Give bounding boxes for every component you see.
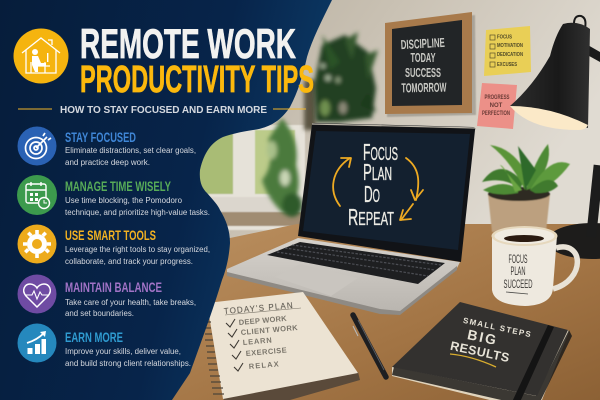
letter board text (400, 35, 447, 95)
plan checklist (238, 314, 299, 371)
plan checklist: DEEP WORK (238, 314, 288, 327)
heading: STAY FOCUSED (65, 130, 136, 145)
keyboard (267, 242, 445, 284)
icon: target (18, 126, 56, 166)
screen text (348, 139, 398, 230)
tip: earn more (18, 324, 191, 368)
sticky checklist text (497, 34, 523, 68)
photo: blurred window plant (262, 80, 316, 217)
mug text: PLAN (510, 264, 526, 278)
heading: MAINTAIN BALANCE (65, 280, 162, 295)
lamp light opening (510, 106, 588, 130)
description: collaborate, and track your progress. (65, 257, 193, 266)
tip: use smart tools (18, 224, 210, 266)
description (65, 245, 210, 266)
letter board text: SUCCESS (405, 65, 441, 80)
sticky checklist text: MOTIVATION (497, 43, 523, 49)
letter board text: TOMORROW (401, 80, 447, 95)
book cover text (449, 316, 532, 365)
book cover text: SMALL STEPS (462, 316, 532, 339)
notebook: today's plan (203, 292, 360, 400)
description: Leverage the right tools to stay organized, (65, 245, 210, 254)
photo: blurred wall plant (314, 32, 378, 122)
description: Use time blocking, the Pomodoro (65, 196, 183, 205)
description: Eliminate distractions, set clear goals, (65, 146, 196, 155)
spiral binding (203, 310, 224, 394)
description: technique, and prioritize high-value tasks. (65, 208, 210, 217)
laptop base (227, 238, 460, 313)
pink note text (482, 95, 510, 117)
description: and practice deep work. (65, 158, 150, 167)
letter board text: DISCIPLINE (400, 35, 445, 52)
icon: growth chart (18, 324, 56, 362)
description (65, 196, 210, 217)
subtitle: HOW TO STAY FOCUSED AND EARN MORE (60, 105, 267, 116)
sticky checklist text: DEDICATION (497, 52, 523, 58)
screen text: REPEAT (348, 204, 394, 230)
mug text (504, 252, 533, 291)
trackpad (275, 264, 358, 296)
book cover text: RESULTS (449, 339, 511, 365)
icon: calendar and clock (17, 175, 57, 215)
mug text: FOCUS (508, 252, 528, 266)
plan checklist: LEARN (242, 335, 272, 347)
description: Take care of your health, take breaks, (65, 298, 196, 307)
heading: MANAGE TIME WISELY (65, 179, 171, 194)
heading: EARN MORE (65, 330, 123, 345)
laptop (227, 123, 475, 315)
title: PRODUCTIVITY TIPS (80, 59, 314, 101)
description: and set boundaries. (65, 309, 134, 318)
tip: stay focused (18, 126, 196, 167)
pink note text: PROGRESS (484, 95, 510, 101)
pink note text: NOT (490, 103, 503, 109)
plan checklist: CLIENT WORK (240, 323, 299, 337)
lamp base (547, 223, 600, 259)
lamp arm joint (582, 44, 600, 62)
title: REMOTE WORK (80, 20, 296, 67)
letter board (385, 12, 476, 117)
tip: manage time wisely (17, 175, 210, 217)
lamp shade (510, 23, 590, 128)
potted plant (482, 144, 570, 232)
photo background: wall (180, 0, 600, 240)
plan heading: TODAY'S PLAN (223, 301, 293, 316)
navy panel (0, 0, 332, 400)
screen text: DO (364, 181, 380, 207)
heading: USE SMART TOOLS (65, 228, 156, 243)
description: Improve your skills, deliver value, (65, 347, 181, 356)
yellow sticky note (484, 26, 531, 76)
pink note text: PERFECTION (482, 111, 510, 117)
photo: window (190, 125, 305, 230)
letter board text: TODAY (410, 50, 436, 65)
screen cycle arrows (333, 158, 423, 220)
black notebook: small steps big results (392, 302, 572, 400)
title (80, 20, 314, 101)
pink sticky note (477, 83, 517, 129)
logo icon: home office (14, 28, 68, 84)
book cover text: BIG (466, 326, 498, 348)
pen (353, 315, 386, 377)
icon: gear (18, 224, 56, 264)
tip: maintain balance (18, 274, 196, 318)
wooden desk (170, 224, 600, 400)
sticky checklist text: EXCUSES (497, 62, 518, 68)
plan checklist: RELAX (248, 359, 279, 371)
description (65, 146, 196, 167)
description: and build strong client relationships. (65, 359, 191, 368)
laptop lid (298, 123, 475, 262)
description (65, 298, 196, 318)
laptop screen (303, 131, 470, 250)
description (65, 347, 191, 368)
screen text: PLAN (363, 159, 392, 185)
icon: heart with pulse (18, 274, 56, 314)
coffee mug (492, 226, 577, 306)
screen text: FOCUS (363, 139, 398, 165)
desk lamp (510, 16, 600, 259)
sticky checklist text: FOCUS (497, 34, 513, 40)
plan check marks (226, 319, 243, 371)
plan checklist: EXERCISE (245, 345, 287, 358)
coffee mug: SUCCEED (504, 277, 533, 291)
elastic band (512, 325, 554, 400)
